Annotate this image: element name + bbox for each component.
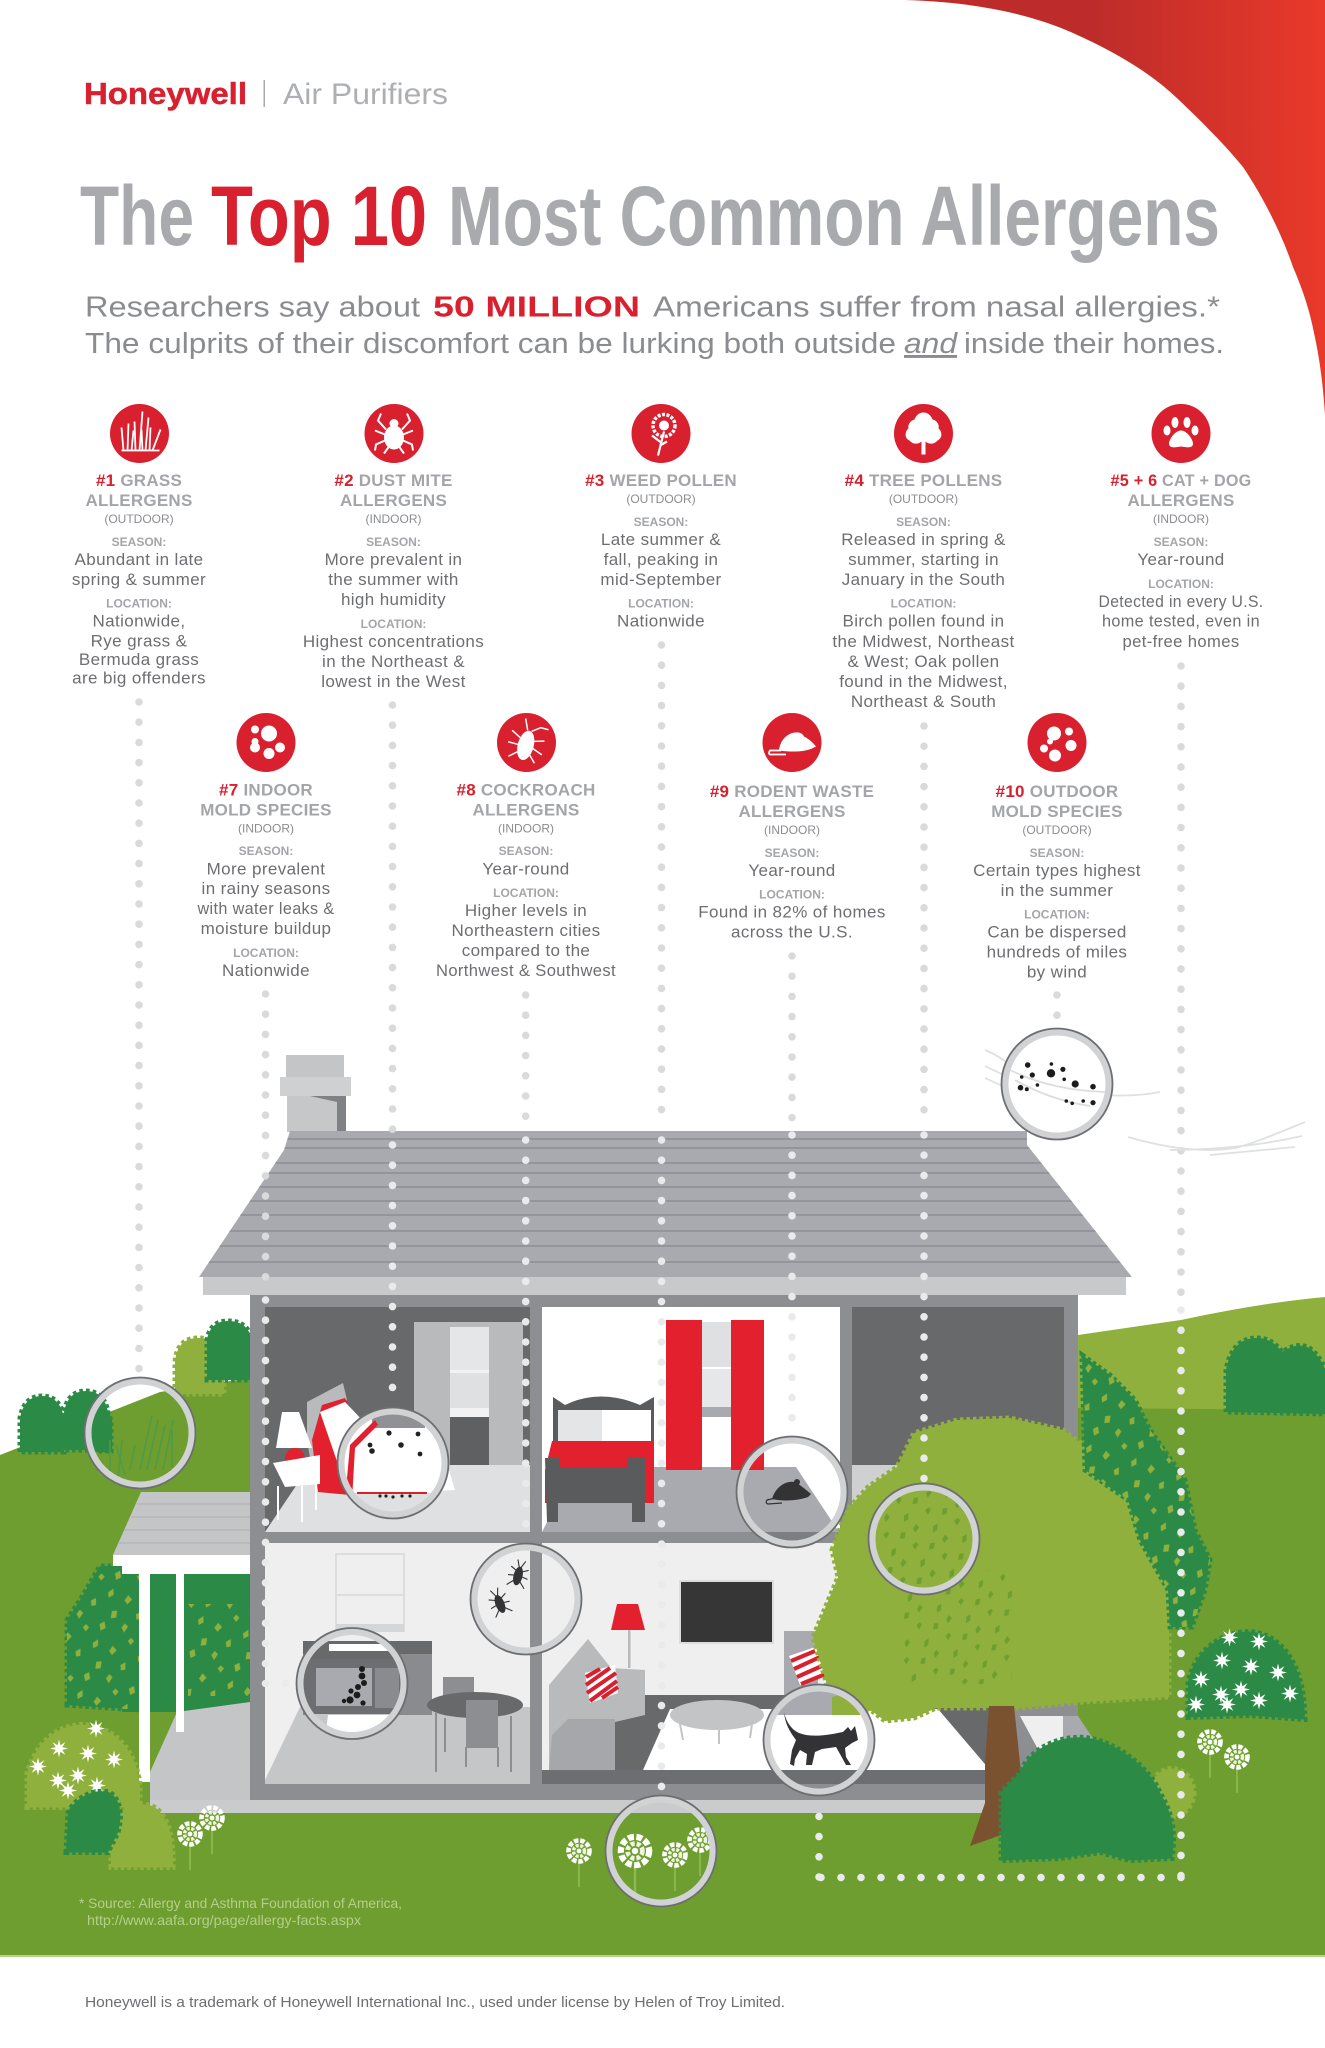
season and location text: LOCATION: xyxy=(1024,908,1090,922)
season and location text: Nationwide, xyxy=(92,612,186,630)
heading xyxy=(334,471,453,526)
card: #5 + 6 cat + dog allergens xyxy=(1098,404,1264,651)
intro text: Researchers say about xyxy=(85,292,420,324)
dotted connector: indoor mold xyxy=(266,994,297,1684)
season and location text xyxy=(600,515,722,630)
season and location text: Rye grass & xyxy=(91,632,188,650)
season and location text: Year-round xyxy=(1137,550,1225,569)
left white flower bush xyxy=(27,1720,173,1868)
heading xyxy=(1110,471,1252,526)
season and location text xyxy=(197,844,335,980)
card: #3 weed pollen xyxy=(585,404,737,630)
season and location text: fall, peaking in xyxy=(604,550,718,569)
season and location text: found in the Midwest, xyxy=(839,672,1008,691)
heading: ALLERGENS xyxy=(472,800,580,820)
season and location text: SEASON: xyxy=(112,535,166,549)
season and location text: pet-free homes xyxy=(1122,632,1240,651)
season and location text: LOCATION: xyxy=(759,888,825,902)
magnifier: rodent xyxy=(730,1436,850,1548)
season and location text: hundreds of miles xyxy=(987,942,1127,962)
heading: #5 + 6 CAT + DOG xyxy=(1110,471,1252,490)
heading: (INDOOR) xyxy=(498,822,554,836)
season and location text: Year-round xyxy=(482,860,570,878)
season and location text: home tested, even in xyxy=(1102,612,1260,630)
icon: mold xyxy=(1028,713,1086,772)
dotted connector: outdoor mold xyxy=(1053,995,1061,1028)
season and location text: Highest concentrations xyxy=(303,632,484,651)
heading: #9 RODENT WASTE xyxy=(710,782,874,801)
logo: Honeywell Air Purifiers xyxy=(84,76,448,111)
heading xyxy=(845,471,1002,506)
trademark line: Honeywell is a trademark of Honeywell International Inc., used under license by Helen of Troy Limited. xyxy=(85,1995,785,2011)
season and location text xyxy=(698,846,886,942)
card: #1 grass allergens xyxy=(72,404,206,688)
season and location text: Northwest & Southwest xyxy=(436,961,616,980)
room: upper right attic xyxy=(852,1307,1064,1532)
intro text: inside their homes. xyxy=(964,328,1224,360)
dotted connector: tree pollen xyxy=(920,726,928,1484)
house: lower right corner and foundation xyxy=(150,1716,1096,1813)
heading: MOLD SPECIES xyxy=(991,802,1123,821)
season and location text: January in the South xyxy=(842,570,1005,589)
heading: ALLERGENS xyxy=(340,491,447,510)
heading: (OUTDOOR) xyxy=(104,512,174,526)
icon: dust mite xyxy=(364,404,424,463)
intro text: The culprits of their discomfort can be lurking both outside xyxy=(85,328,896,360)
card: #9 rodent waste allergens xyxy=(698,713,886,942)
lamp and side table xyxy=(273,1412,320,1522)
season and location text: are big offenders xyxy=(72,668,206,688)
season and location text: Higher levels in xyxy=(465,901,587,920)
intro text xyxy=(85,292,1224,360)
season and location text: in the summer xyxy=(1001,881,1113,900)
dotted connector: cat and dog xyxy=(819,666,1181,1878)
heading: (INDOOR) xyxy=(1153,512,1209,526)
season and location text: Northeast & South xyxy=(851,692,996,711)
season and location text: SEASON: xyxy=(896,515,951,529)
coffee table xyxy=(670,1700,764,1744)
season and location text: More prevalent in xyxy=(325,550,462,569)
icon: dandelion xyxy=(632,404,690,463)
intro text: Americans suffer from nasal allergies.* xyxy=(653,292,1220,324)
season and location text: Bermuda grass xyxy=(79,650,199,669)
room: upper left bedroom xyxy=(265,1307,530,1532)
magnifier: outdoor mold xyxy=(1002,1028,1112,1140)
heading xyxy=(200,780,332,836)
heading: #8 COCKROACH xyxy=(456,780,596,800)
season and location text: high humidity xyxy=(341,590,446,609)
bed: tilted red and white xyxy=(307,1383,455,1495)
cabinets xyxy=(303,1641,432,1715)
magnifier: weed pollen xyxy=(606,1796,716,1906)
icon: grass xyxy=(110,404,169,463)
season and location text: summer, starting in xyxy=(848,550,999,569)
season and location text: LOCATION: xyxy=(493,886,559,900)
season and location text: across the U.S. xyxy=(731,922,853,942)
icon: mold xyxy=(236,713,296,772)
wind lines xyxy=(985,1050,1305,1155)
season and location text: SEASON: xyxy=(239,844,293,858)
right white flower bush xyxy=(1187,1628,1305,1720)
dining table and chairs xyxy=(427,1677,523,1772)
magnifier: cockroaches xyxy=(470,1544,582,1654)
footnote xyxy=(79,1895,402,1928)
season and location text: LOCATION: xyxy=(1148,577,1214,591)
front bushes xyxy=(1001,1737,1194,1860)
room: living room xyxy=(542,1543,1010,1784)
sofa xyxy=(549,1639,645,1770)
heading: MOLD SPECIES xyxy=(200,800,332,820)
footnote: http://www.aafa.org/page/allergy-facts.aspx xyxy=(87,1912,361,1928)
season and location text xyxy=(832,515,1015,711)
window with red curtains xyxy=(666,1320,764,1470)
house: roof xyxy=(190,1131,1140,1295)
heading: #1 GRASS xyxy=(96,471,182,490)
house: chimney xyxy=(280,1055,351,1132)
season and location text: Northeastern cities xyxy=(452,921,600,940)
card: #4 tree pollens xyxy=(832,404,1015,711)
kitchen window xyxy=(336,1554,404,1632)
season and location text: lowest in the West xyxy=(321,672,466,691)
heading: (OUTDOOR) xyxy=(889,492,958,506)
heading: (INDOOR) xyxy=(238,822,294,836)
season and location text: Certain types highest xyxy=(973,861,1141,880)
heading: #4 TREE POLLENS xyxy=(845,471,1002,490)
card: #10 outdoor mold species xyxy=(973,713,1141,982)
season and location text xyxy=(973,846,1141,982)
dotted connector: dust mite xyxy=(389,705,396,1405)
bed xyxy=(545,1396,654,1522)
dotted connector: weed pollen xyxy=(658,645,665,1798)
season and location text xyxy=(72,535,206,688)
season and location text: More prevalent xyxy=(207,860,325,878)
season and location text: SEASON: xyxy=(1154,535,1208,549)
heading: ALLERGENS xyxy=(85,491,193,510)
floor lamp xyxy=(611,1604,645,1668)
season and location text: SEASON: xyxy=(634,515,688,529)
season and location text: SEASON: xyxy=(765,846,819,860)
dandelions xyxy=(180,1732,1248,1887)
season and location text xyxy=(436,844,616,980)
room: upper middle bedroom xyxy=(542,1307,840,1532)
magnifier: cat xyxy=(764,1684,874,1796)
magnifier: tree pollen xyxy=(868,1484,980,1594)
season and location text: Birch pollen found in xyxy=(842,612,1005,630)
card: #7 indoor mold species xyxy=(197,713,335,980)
heading: #3 WEED POLLEN xyxy=(585,471,737,490)
season and location text: SEASON: xyxy=(499,844,553,858)
heading: (OUTDOOR) xyxy=(1022,823,1092,837)
season and location text xyxy=(303,535,484,691)
title: The xyxy=(80,169,194,263)
title xyxy=(80,169,1220,263)
magnifier: indoor mold xyxy=(296,1628,414,1740)
tree xyxy=(813,1418,1169,1846)
house: frame xyxy=(250,1295,1078,1800)
season and location text: Year-round xyxy=(748,861,836,880)
season and location text xyxy=(1098,535,1264,651)
season and location text: Detected in every U.S. xyxy=(1098,592,1264,611)
background bushes xyxy=(20,1321,1325,1452)
dotted connector: cockroach xyxy=(522,995,530,1540)
season and location text: Late summer & xyxy=(601,530,721,549)
heading: #2 DUST MITE xyxy=(334,471,453,490)
heading: #7 INDOOR xyxy=(219,780,313,800)
season and location text: Can be dispersed xyxy=(987,922,1127,942)
season and location text: LOCATION: xyxy=(233,946,299,960)
card: #2 dust mite allergens xyxy=(303,404,484,691)
heading xyxy=(85,471,193,526)
tree trunk xyxy=(970,1706,1022,1846)
season and location text: LOCATION: xyxy=(891,596,956,610)
season and location text: LOCATION: xyxy=(628,596,694,610)
season and location text: LOCATION: xyxy=(106,596,172,610)
season and location text: SEASON: xyxy=(1030,846,1084,860)
magnifier: dust mites on bed xyxy=(338,1408,449,1518)
season and location text: mid-September xyxy=(600,570,722,589)
season and location text: in the Northeast & xyxy=(322,652,465,671)
tv xyxy=(680,1581,773,1643)
season and location text: moisture buildup xyxy=(201,919,331,938)
heading xyxy=(585,471,737,506)
heading xyxy=(710,782,874,837)
dotted connector: rodent xyxy=(788,956,796,1437)
footnote: * Source: Allergy and Asthma Foundation of America, xyxy=(79,1895,402,1911)
season and location text: Nationwide xyxy=(222,961,310,980)
season and location text: by wind xyxy=(1027,962,1087,982)
heading: ALLERGENS xyxy=(1127,491,1235,510)
heading xyxy=(456,780,596,836)
intro text: and xyxy=(904,328,958,360)
icon: rodent xyxy=(762,713,822,772)
season and location text: LOCATION: xyxy=(361,617,426,631)
heading: #10 OUTDOOR xyxy=(996,782,1118,801)
season and location text: Nationwide xyxy=(617,612,705,630)
season and location text: the Midwest, Northeast xyxy=(832,632,1015,651)
season and location text: in rainy seasons xyxy=(202,879,330,898)
room: kitchen xyxy=(265,1543,530,1784)
intro text: 50 MILLION xyxy=(433,292,640,324)
title: Top 10 xyxy=(211,169,427,263)
dotted connector: grass xyxy=(135,702,143,1378)
season and location text: & West; Oak pollen xyxy=(847,652,1000,671)
vine bush on the right xyxy=(1082,1355,1210,1627)
icon: paw xyxy=(1152,404,1210,463)
season and location text: the summer with xyxy=(328,570,459,589)
season and location text: with water leaks & xyxy=(197,899,335,918)
season and location text: Released in spring & xyxy=(841,530,1006,549)
heading xyxy=(991,782,1123,837)
card: #8 cockroach allergens xyxy=(436,713,616,980)
icon: cockroach xyxy=(497,713,556,772)
heading: (INDOOR) xyxy=(366,512,422,526)
porch xyxy=(67,1492,250,1813)
magnifier: grass xyxy=(84,1378,196,1488)
season and location text: compared to the xyxy=(462,941,590,960)
heading: (INDOOR) xyxy=(764,823,820,837)
armchair with pillow xyxy=(784,1631,830,1695)
icon: tree xyxy=(894,404,953,463)
heading: (OUTDOOR) xyxy=(626,492,696,506)
ground and hills xyxy=(0,1297,1325,1957)
season and location text: Found in 82% of homes xyxy=(698,902,886,922)
heading: ALLERGENS xyxy=(738,802,846,821)
logo: Honeywell Air Purifiers: Honeywell xyxy=(84,76,247,111)
red corner swoop xyxy=(905,0,1325,415)
season and location text: SEASON: xyxy=(366,535,421,549)
tree speckles xyxy=(900,1570,1012,1684)
logo: Honeywell Air Purifiers: Air Purifiers xyxy=(283,78,448,111)
season and location text: spring & summer xyxy=(72,570,206,589)
season and location text: Abundant in late xyxy=(75,550,203,569)
